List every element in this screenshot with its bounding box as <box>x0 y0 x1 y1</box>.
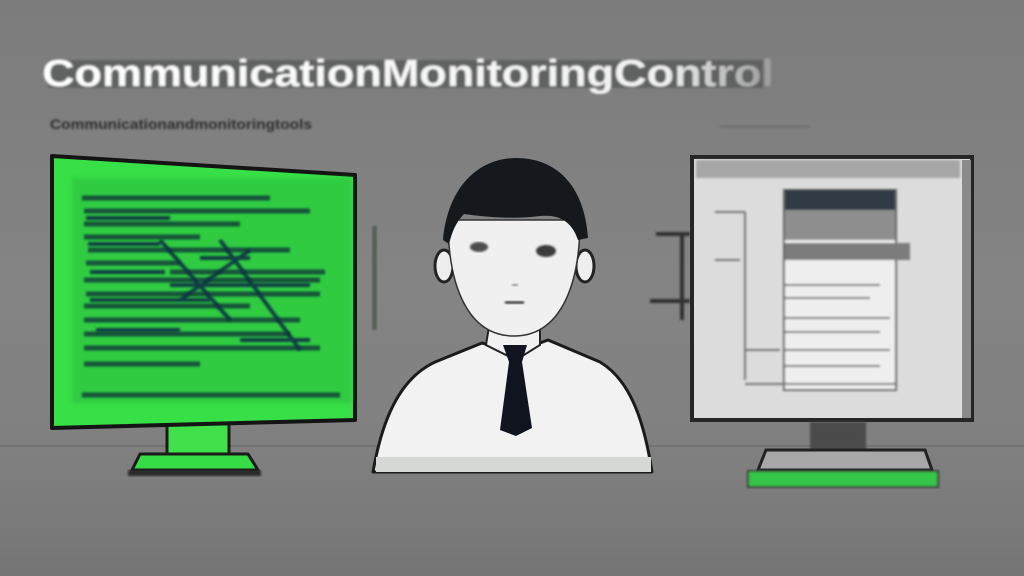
faint right caption <box>720 125 810 128</box>
desk line <box>0 445 1024 447</box>
left monitor: green code screen <box>52 156 355 476</box>
screen code lines <box>82 198 340 395</box>
monitor screen <box>52 156 355 428</box>
title: CommunicationMonitoringControl <box>42 53 774 95</box>
neck and collar <box>486 320 540 360</box>
nose <box>512 284 518 286</box>
monitor stand <box>128 424 261 476</box>
monitor frame <box>692 157 972 420</box>
hair <box>443 158 588 244</box>
ears <box>435 250 453 282</box>
side connector <box>650 234 690 320</box>
small divider left of person <box>372 226 377 330</box>
document on screen <box>715 190 910 390</box>
subtitle: Communicationandmonitoringtools <box>50 116 312 132</box>
screen inner panel <box>72 178 352 403</box>
eyes <box>470 242 488 252</box>
tie <box>500 345 532 436</box>
face <box>448 220 580 336</box>
right monitor: document screen <box>650 157 972 487</box>
body <box>373 340 652 472</box>
mouth <box>505 301 524 304</box>
monitor stand <box>748 422 938 487</box>
person <box>373 158 652 472</box>
